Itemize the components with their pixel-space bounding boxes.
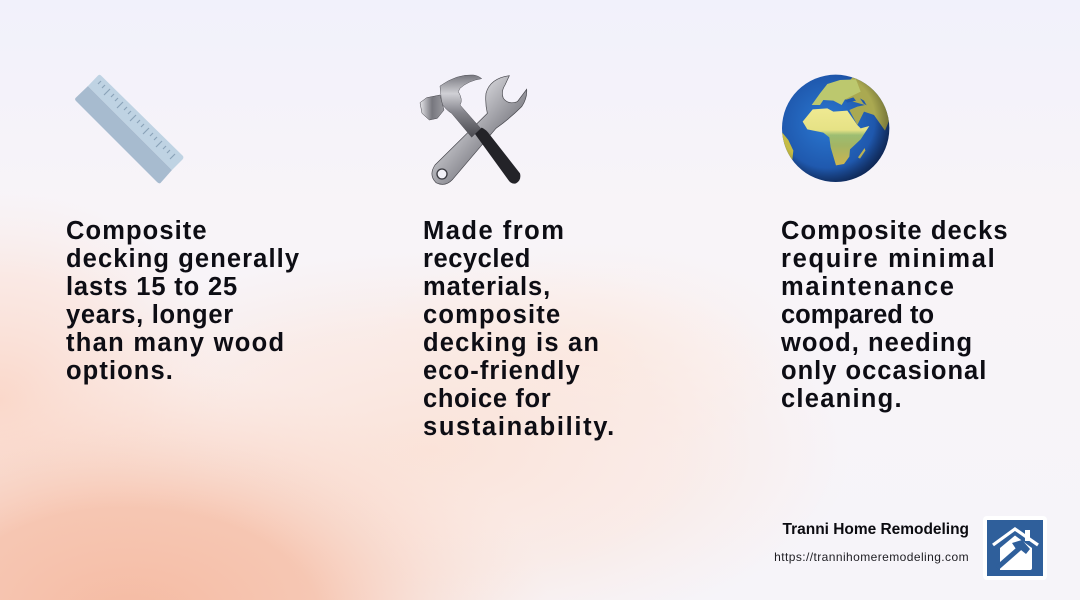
text: durability: lasts 15 to 25	[66, 273, 238, 301]
text: recycled materials: Made from	[423, 217, 565, 245]
text: recycled materials	[423, 217, 616, 441]
text: maintenance	[780, 217, 1009, 413]
text: recycled materials: decking is an	[423, 329, 600, 357]
icon: ruler	[75, 74, 184, 184]
text: recycled materials: composite	[423, 301, 561, 329]
text: recycled materials: choice for	[423, 385, 551, 413]
wrench	[432, 76, 527, 184]
hammer grip	[475, 128, 520, 184]
text: maintenance: maintenance	[781, 273, 956, 301]
text: maintenance: compared to	[781, 301, 934, 329]
text: durability: years, longer	[66, 301, 234, 329]
hammer head	[440, 75, 482, 137]
text: recycled materials: materials,	[423, 273, 551, 301]
icon: logo	[983, 516, 1047, 580]
text: recycled materials: sustainability.	[423, 413, 616, 441]
black sea and caspian	[845, 97, 867, 105]
text: durability	[66, 217, 300, 385]
ruler top face	[88, 75, 183, 170]
text: maintenance: Composite decks	[781, 217, 1009, 245]
text: durability: options.	[66, 357, 174, 385]
africa	[803, 108, 869, 165]
text: durability: decking generally	[66, 245, 300, 273]
website url: https://trannihomeremodeling.com	[774, 550, 969, 564]
text: durability: than many wood	[66, 329, 285, 357]
south america	[782, 132, 794, 160]
madagascar	[858, 148, 865, 159]
ruler side face	[75, 86, 172, 183]
text: maintenance: cleaning.	[781, 385, 903, 413]
text: maintenance: only occasional	[781, 357, 987, 385]
text: recycled materials: eco-friendly	[423, 357, 581, 385]
icon: hammer and wrench	[420, 74, 528, 185]
europe	[812, 79, 861, 105]
text: recycled materials: recycled	[423, 245, 531, 273]
brand name: Tranni Home Remodeling	[783, 521, 969, 538]
text: maintenance: wood, needing	[781, 329, 973, 357]
text: durability: Composite	[66, 217, 208, 245]
text: maintenance: require minimal	[781, 245, 996, 273]
asia and middle east	[845, 77, 890, 131]
icon: globe	[782, 74, 890, 182]
